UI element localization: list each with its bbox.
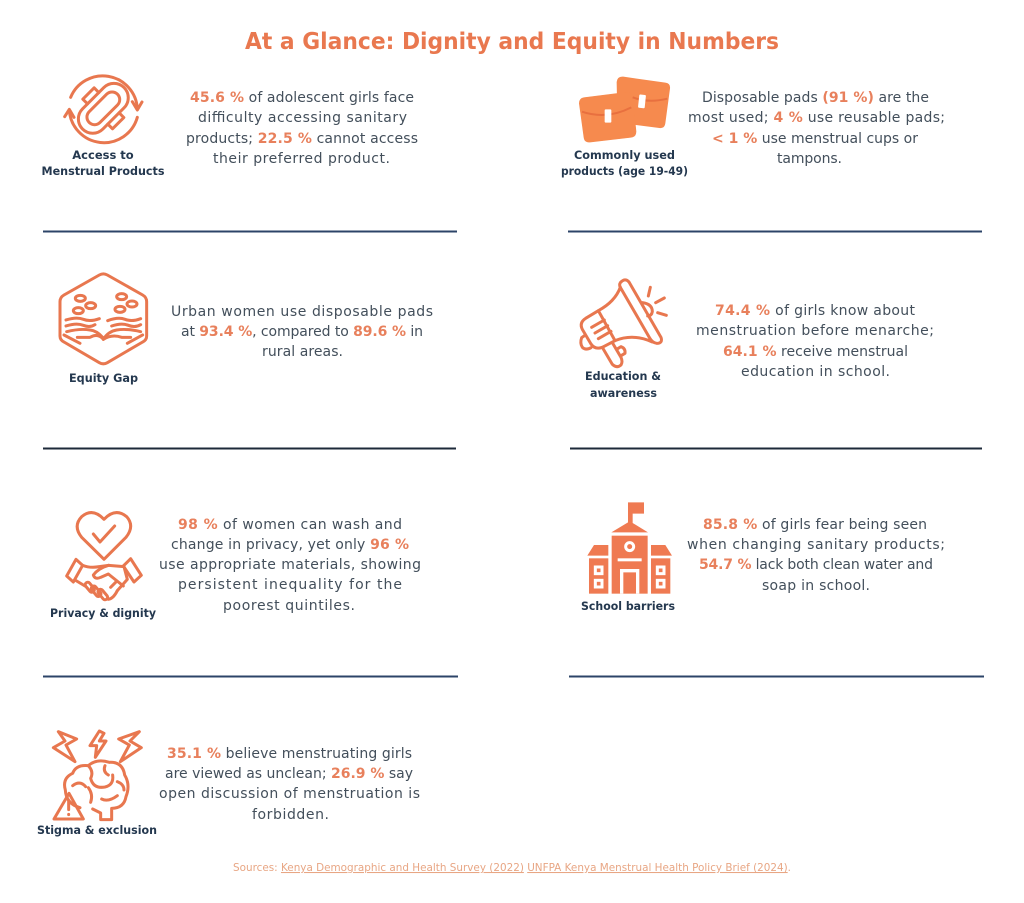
label: equity gap: Equity Gap bbox=[69, 371, 138, 385]
text: access statistics: difficulty accessing sanitary bbox=[198, 110, 407, 126]
label: commonly used products: products (age 19-49) bbox=[561, 164, 688, 178]
label: commonly used products bbox=[561, 148, 688, 178]
text: access statistics: their preferred product. bbox=[213, 151, 390, 167]
panel: stigma and exclusion bbox=[37, 731, 420, 837]
text: equity statistics: rural areas. bbox=[262, 344, 343, 360]
text: privacy statistics bbox=[159, 517, 421, 614]
text: education statistics: menstruation before menarche; bbox=[696, 323, 934, 339]
label: access to menstrual products: Access to bbox=[72, 148, 134, 162]
text: education statistics: education in school. bbox=[741, 364, 890, 380]
icon: megaphone bbox=[581, 280, 666, 367]
icon: hexagon with hands and coins bbox=[60, 274, 147, 364]
text: equity statistics: Urban women use disposable pads bbox=[171, 304, 433, 320]
text: school statistics: 85.8 % of girls fear being seen bbox=[703, 517, 927, 533]
text: privacy statistics: persistent inequality for the bbox=[178, 577, 402, 593]
text: stigma statistics: 35.1 % believe menstruating girls bbox=[167, 746, 412, 762]
panel: privacy and dignity bbox=[50, 513, 421, 620]
icon: brain with lightning and warning bbox=[53, 731, 141, 820]
panel: commonly used products bbox=[561, 77, 945, 178]
text: privacy statistics: poorest quintiles. bbox=[223, 598, 355, 614]
text: privacy statistics: change in privacy, yet only 96 % bbox=[171, 537, 409, 553]
text: stigma statistics: open discussion of menstruation is bbox=[159, 786, 420, 802]
label: stigma and exclusion: Stigma & exclusion bbox=[37, 823, 157, 837]
label: access to menstrual products bbox=[42, 148, 165, 178]
icon: disposable pads bbox=[579, 77, 670, 142]
panel: education and awareness bbox=[581, 280, 934, 400]
text: product statistics: < 1 % use menstrual cups or bbox=[712, 131, 918, 147]
label: school barriers: School barriers bbox=[581, 599, 675, 613]
panel: school barriers bbox=[581, 502, 945, 613]
label: access to menstrual products: Menstrual Products bbox=[42, 164, 165, 178]
text: product statistics: most used; 4 % use reusable pads; bbox=[688, 110, 945, 126]
text: stigma statistics: forbidden. bbox=[252, 807, 329, 823]
text: education statistics: 64.1 % receive menstrual bbox=[723, 344, 908, 360]
title: At a Glance: Dignity and Equity in Numbers bbox=[245, 27, 779, 55]
text: equity statistics: at 93.4 %, compared to 89.6 % in bbox=[181, 324, 423, 340]
text: product statistics: Disposable pads (91 %) are the bbox=[702, 90, 929, 106]
text: access statistics: 45.6 % of adolescent girls face bbox=[190, 90, 414, 106]
label: education and awareness bbox=[585, 369, 661, 400]
text: privacy statistics: use appropriate materials, showing bbox=[159, 557, 421, 573]
text: stigma statistics: are viewed as unclean; 26.9 % say bbox=[165, 766, 413, 782]
text: education statistics: 74.4 % of girls know about bbox=[715, 303, 916, 319]
text: education statistics bbox=[696, 303, 934, 380]
text: equity statistics bbox=[171, 304, 433, 360]
text: school statistics: soap in school. bbox=[762, 578, 870, 594]
label: privacy and dignity: Privacy & dignity bbox=[50, 606, 156, 620]
icon: school building bbox=[587, 502, 672, 594]
text: school statistics: when changing sanitary products; bbox=[687, 537, 945, 553]
panel: access to menstrual products bbox=[42, 73, 418, 178]
divider bbox=[43, 230, 982, 232]
text: access statistics: products; 22.5 % cannot access bbox=[186, 131, 418, 147]
icon: heart and handshake bbox=[67, 513, 141, 601]
divider bbox=[43, 448, 982, 450]
sources footnote: Sources: Kenya Demographic and Health Survey (2022) UNFPA Kenya Menstrual Health Policy Brief (2024). bbox=[233, 862, 791, 874]
text: access statistics bbox=[186, 90, 418, 167]
label: commonly used products: Commonly used bbox=[574, 148, 675, 162]
panel: equity gap bbox=[60, 274, 433, 385]
text: product statistics bbox=[688, 90, 945, 167]
text: school statistics: 54.7 % lack both clean water and bbox=[699, 557, 933, 573]
label: education and awareness: awareness bbox=[590, 386, 657, 400]
text: school statistics bbox=[687, 517, 945, 594]
text: privacy statistics: 98 % of women can wash and bbox=[178, 517, 402, 533]
text: product statistics: tampons. bbox=[777, 151, 842, 167]
label: education and awareness: Education & bbox=[585, 369, 661, 383]
text: stigma statistics bbox=[159, 746, 420, 823]
divider bbox=[43, 676, 984, 678]
icon: sanitary pad in cycle arrows bbox=[65, 73, 142, 144]
